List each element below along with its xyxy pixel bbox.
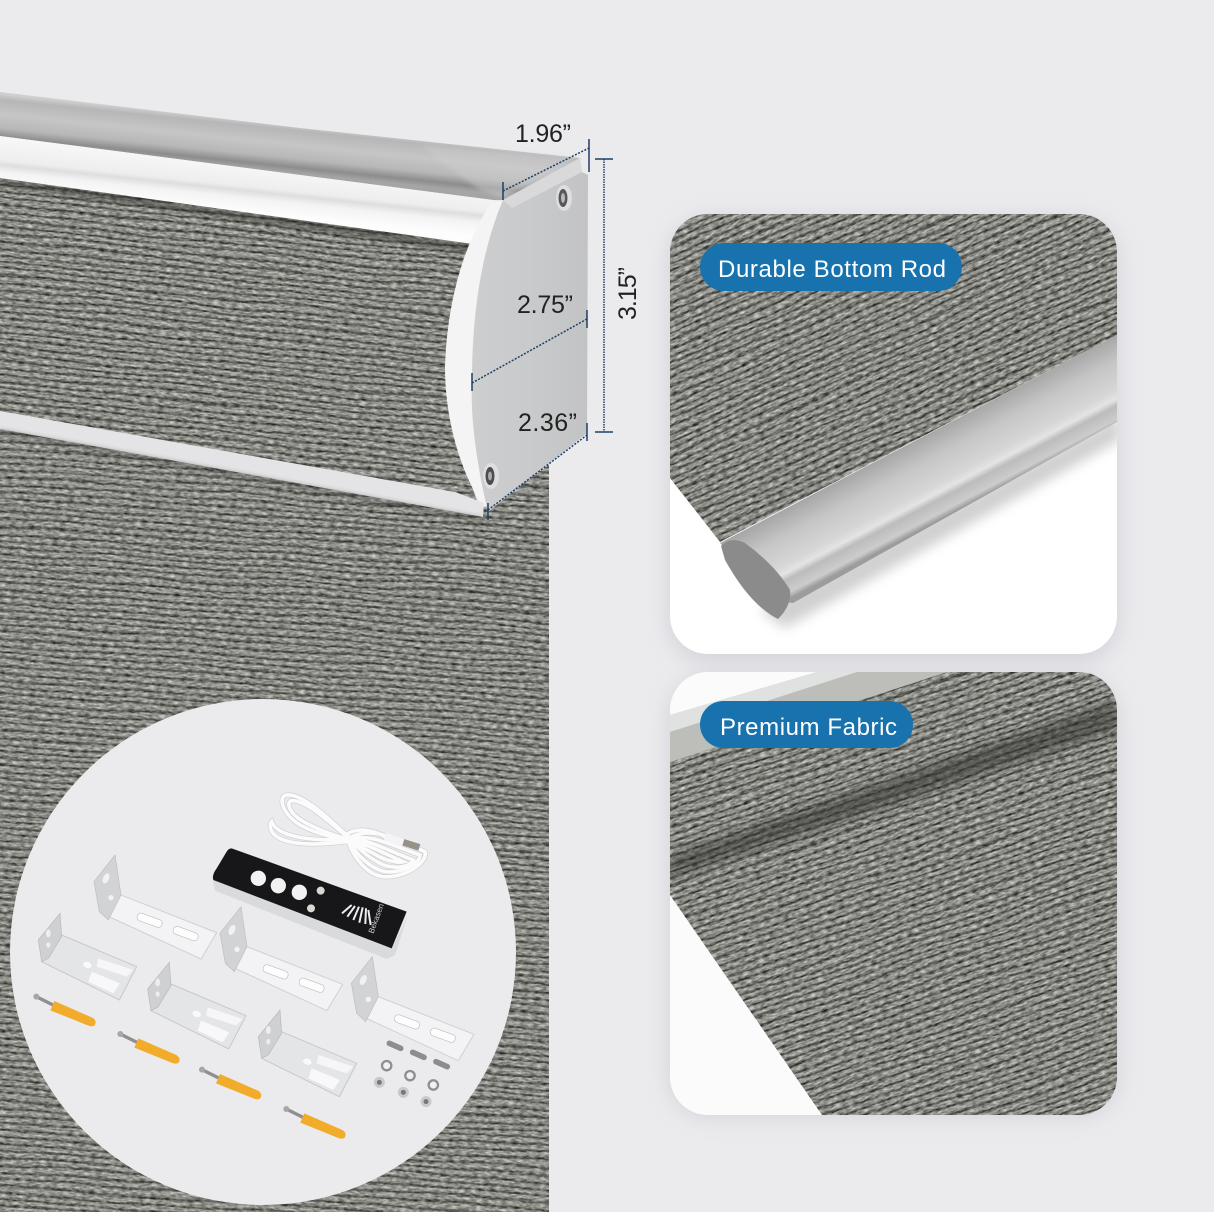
rail: white front band	[0, 136, 500, 245]
icon: short mounting brackets	[38, 913, 357, 1097]
card shadow	[670, 678, 1117, 1115]
rod end cap	[721, 540, 790, 619]
panel: premium fabric	[670, 672, 1117, 1115]
label pill: Premium Fabric	[720, 714, 897, 741]
dimension: depth 2.36: 2.36”	[518, 409, 577, 437]
rail highlight	[670, 672, 857, 732]
shadow under the rail	[0, 178, 482, 254]
dimension: width 1.96	[503, 120, 589, 200]
dimension: depth 2.75	[472, 291, 587, 391]
rail: tube end highlight	[420, 145, 580, 198]
dimension: depth 2.75: 2.75”	[517, 291, 573, 319]
fabric fold shadow	[670, 700, 1117, 878]
icon: remote control	[213, 848, 407, 959]
cassette white rim	[445, 200, 525, 507]
upper fabric roll	[0, 178, 485, 510]
panel: included hardware circle	[10, 699, 516, 1205]
icon: remote control: Bekasen	[367, 902, 386, 935]
rod body	[720, 335, 1117, 603]
icon: USB cable	[270, 795, 425, 877]
icon: washers and nuts	[375, 1061, 438, 1106]
dimension: height 3.15: 3.15”	[614, 267, 642, 320]
rail: gray tube	[0, 92, 580, 200]
dimension: depth 2.36	[488, 409, 587, 520]
cap highlight	[503, 158, 582, 208]
screw top	[556, 185, 572, 211]
fabric close-up	[670, 672, 1117, 1115]
screw bottom	[483, 463, 499, 489]
card shadow	[670, 220, 1117, 660]
rail in the photo	[670, 672, 947, 762]
shadow below bottom bar	[0, 429, 483, 522]
panel: shade headrail with cassette	[0, 92, 588, 522]
fabric close-up	[670, 214, 1117, 542]
icon: long mounting brackets	[94, 855, 474, 1061]
dimension: height 3.15	[595, 159, 642, 432]
bottom bar of the roll	[0, 411, 484, 517]
icon: screws	[389, 1043, 447, 1067]
dimension: width 1.96: 1.96”	[515, 120, 571, 148]
label pill	[700, 243, 962, 291]
panel: durable bottom rod	[670, 214, 1120, 660]
rod shadow	[760, 415, 1120, 628]
cassette end cap	[472, 158, 588, 512]
label pill	[700, 701, 913, 748]
label pill: Durable Bottom Rod	[718, 256, 946, 283]
icon: wall anchors	[33, 994, 346, 1139]
panel: hanging shade fabric	[0, 420, 549, 1212]
